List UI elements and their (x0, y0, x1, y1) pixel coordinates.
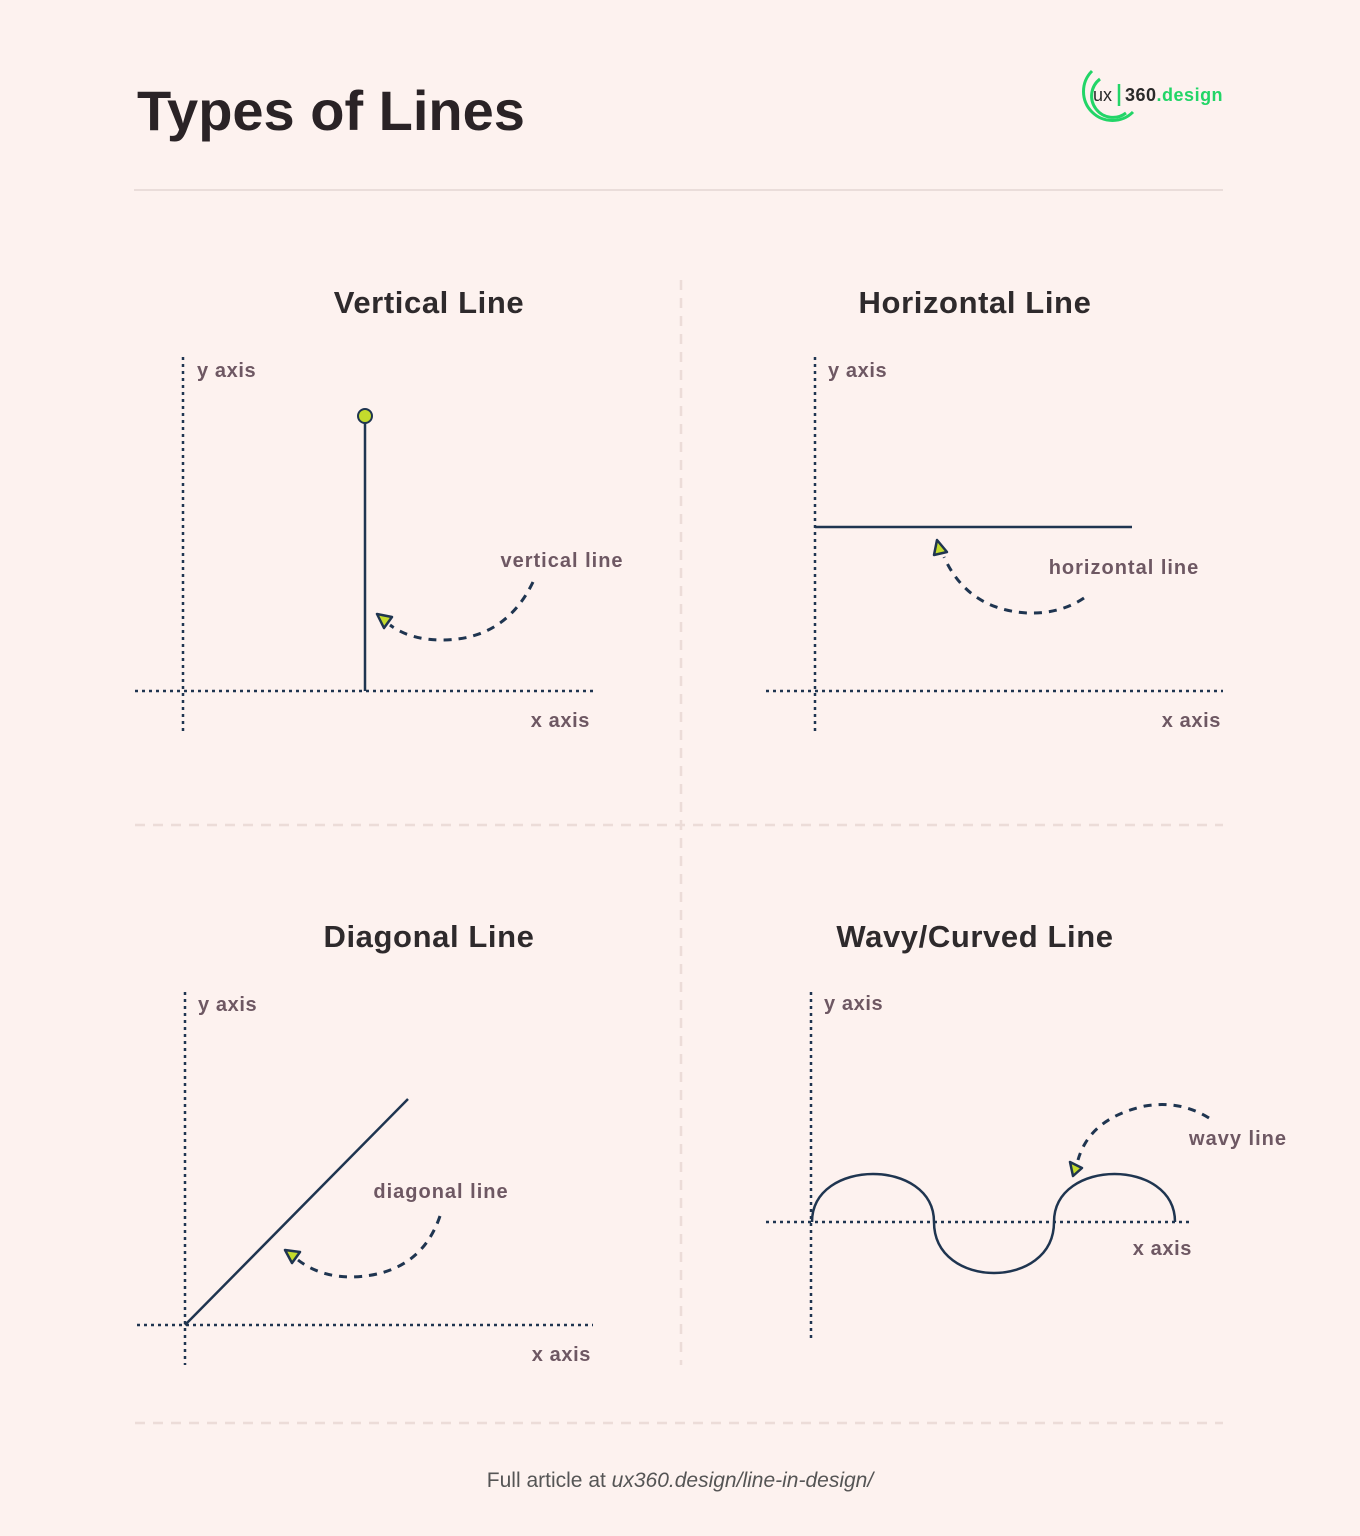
panel: horizontal line: x axis (1162, 710, 1221, 732)
panel: vertical line: x axis (531, 710, 590, 732)
panel: vertical line: vertical line (500, 550, 624, 572)
panel: diagonal line: x axis (532, 1344, 591, 1366)
panel: wavy line: x axis (1133, 1238, 1192, 1260)
panel: diagonal line: diagonal line (373, 1181, 509, 1203)
panel: vertical line (135, 285, 624, 732)
panel: wavy line: wavy line (1188, 1128, 1287, 1150)
heading: vertical: Vertical Line (334, 285, 524, 320)
panel: horizontal line: y axis (828, 360, 887, 382)
heading: wavy: Wavy/Curved Line (836, 919, 1114, 954)
panel: horizontal line: horizontal line (1049, 557, 1199, 579)
title: Types of Lines (137, 79, 525, 142)
panel: vertical line: y axis (197, 360, 256, 382)
panel: horizontal line (766, 285, 1223, 732)
panel: wavy line (766, 919, 1287, 1340)
heading: horizontal: Horizontal Line (859, 285, 1091, 320)
panel: wavy line: y axis (824, 993, 883, 1015)
footer: Full article at ux360.design/line-in-design/ (487, 1469, 875, 1492)
logo: ux (1093, 85, 1112, 105)
panel: diagonal line: y axis (198, 994, 257, 1016)
heading: diagonal: Diagonal Line (323, 919, 535, 954)
panel: diagonal line (137, 919, 593, 1366)
logo: 360.design (1125, 85, 1223, 105)
logo (1084, 71, 1223, 120)
